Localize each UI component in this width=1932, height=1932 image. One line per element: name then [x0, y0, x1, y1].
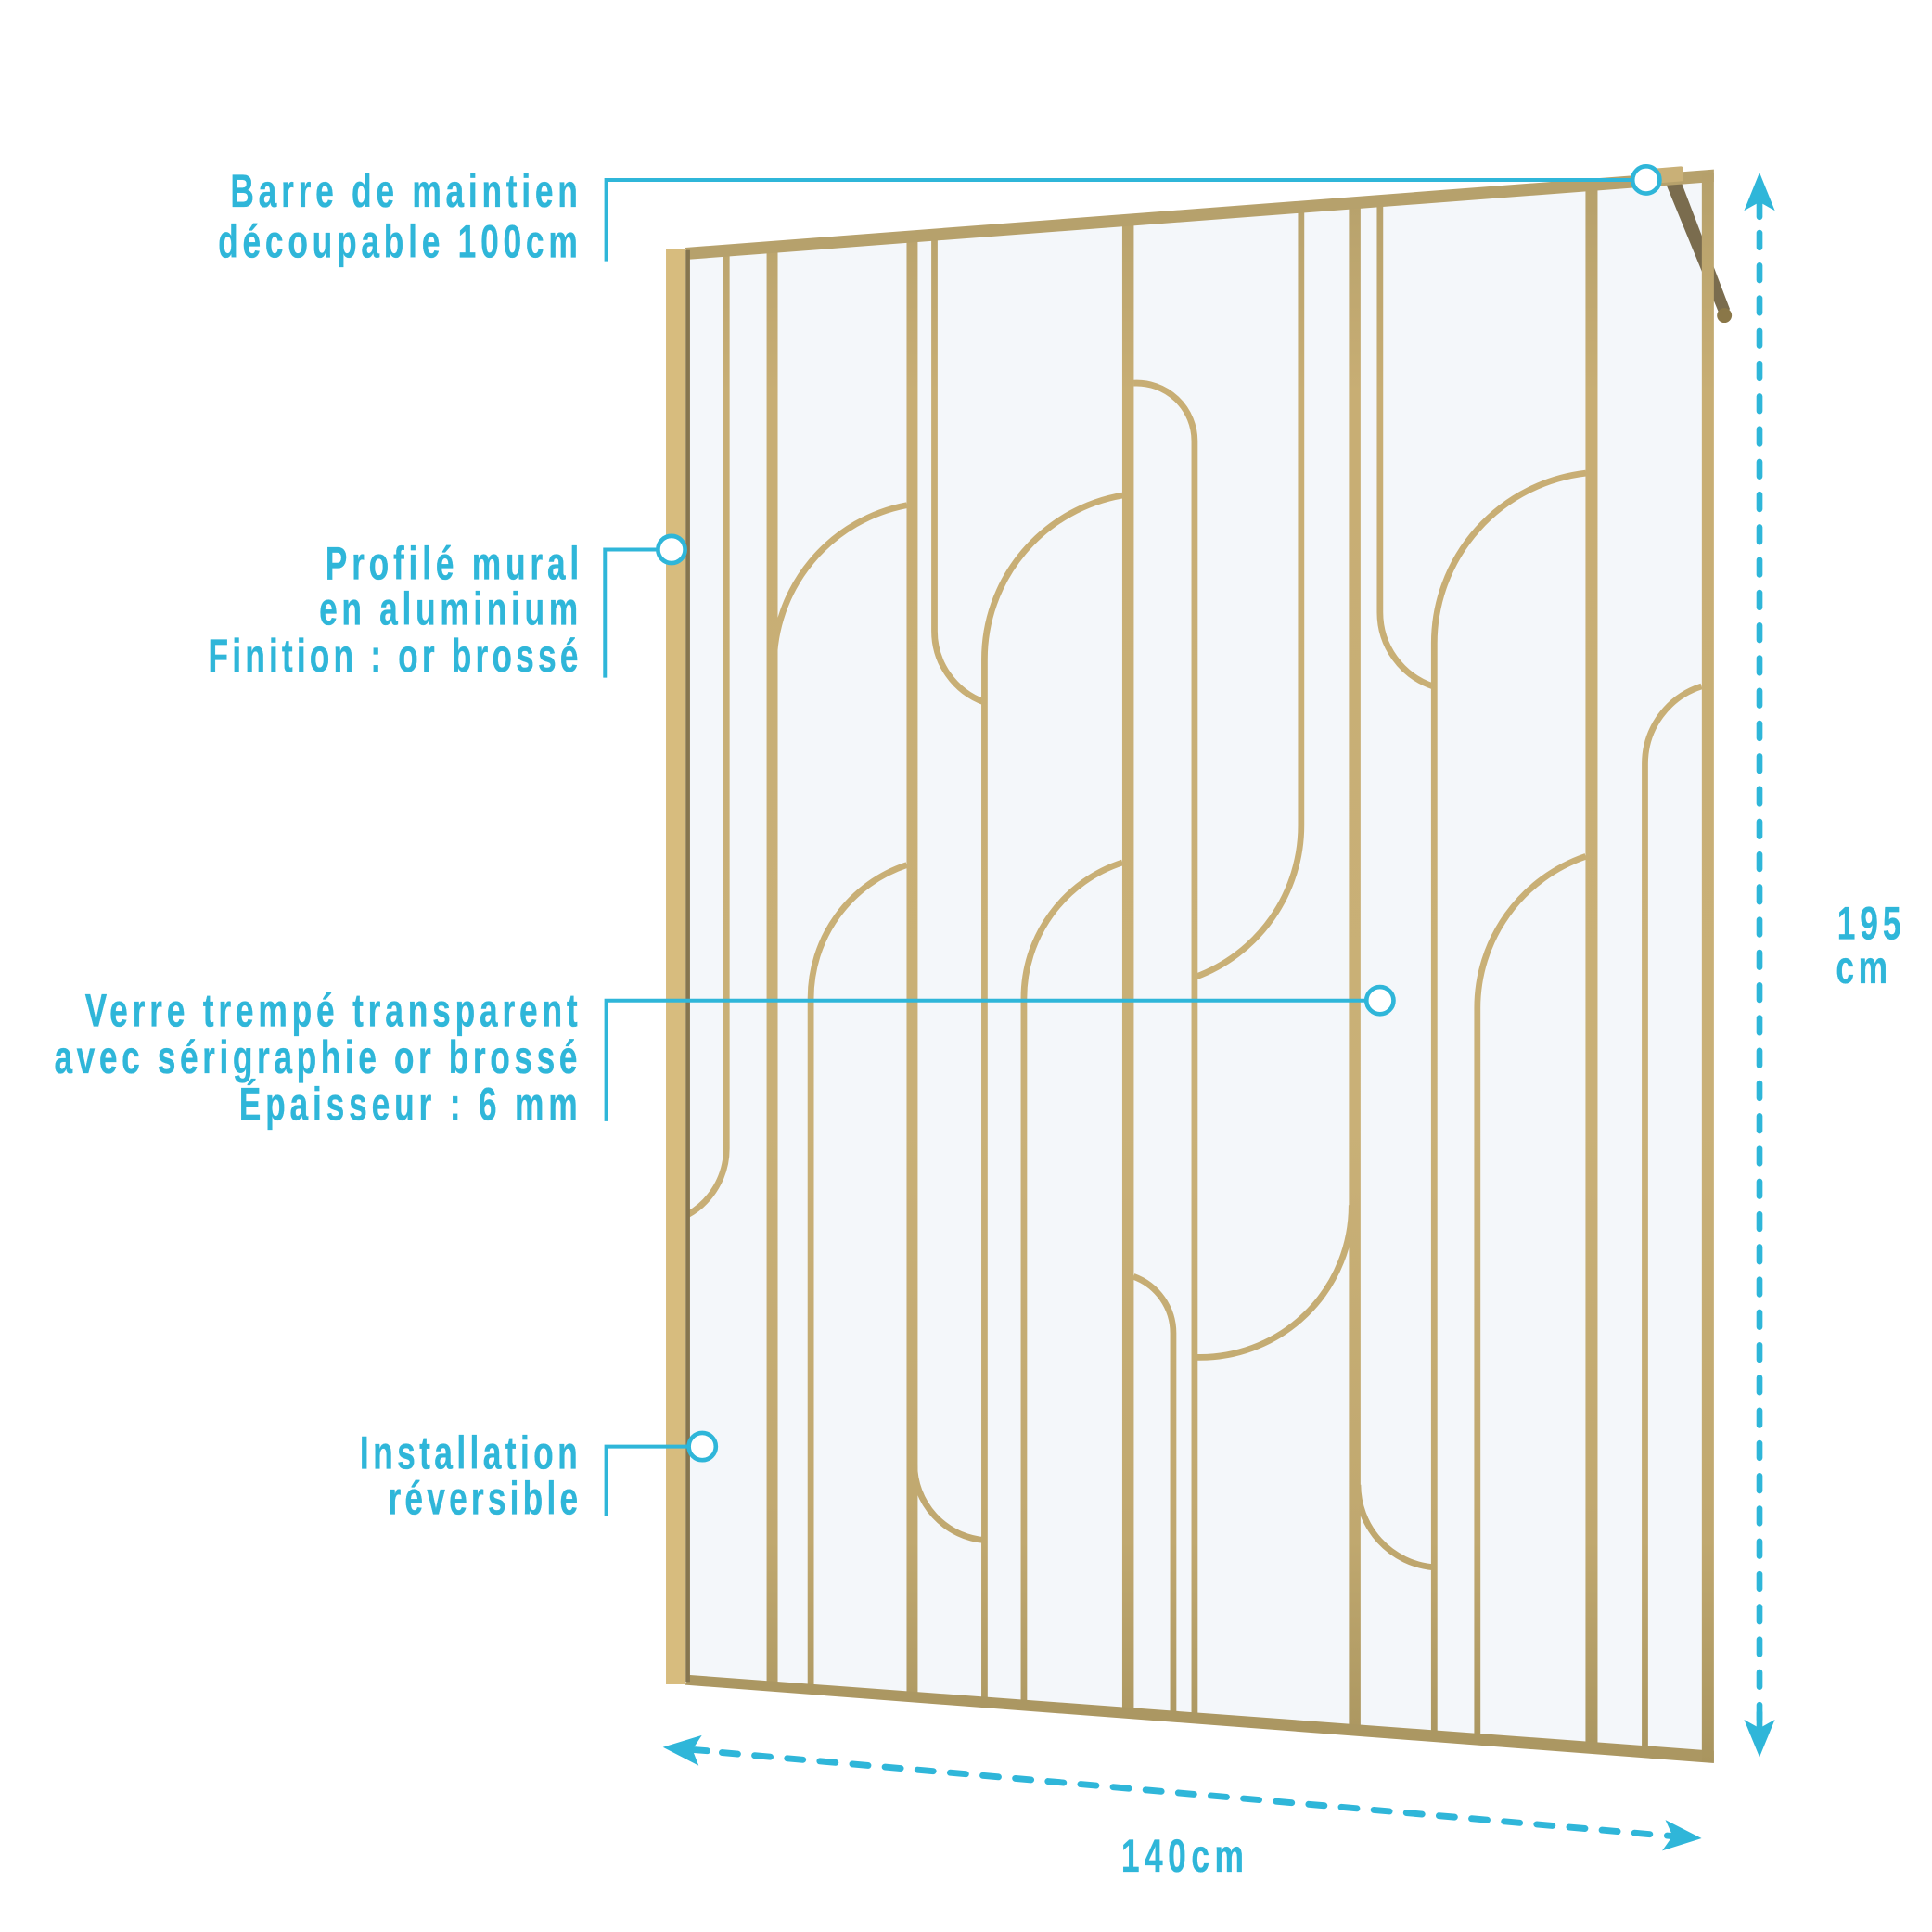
- height dimension arrow: [1744, 173, 1775, 1757]
- vertical gold bars: [767, 185, 1597, 1745]
- wall profile: [666, 249, 690, 1684]
- height label: [1836, 898, 1901, 994]
- outer frame: [685, 170, 1714, 1763]
- callout: barre de maintien: découpable 100cm: [218, 217, 578, 268]
- callout: verre trempé: [54, 986, 1393, 1131]
- callout: profilé mural: [209, 536, 685, 683]
- callout: profilé mural: Profilé mural: [326, 539, 579, 590]
- height label: 195: [1837, 898, 1901, 950]
- callout: profilé mural: Finition : or brossé: [209, 631, 578, 683]
- width dimension arrow: [663, 1735, 1702, 1850]
- callout: verre trempé: Épaisseur : 6 mm: [239, 1080, 578, 1131]
- glass panel: [687, 180, 1707, 1755]
- callout: installation réversible: Installation: [360, 1428, 578, 1479]
- stabiliser arm: [1666, 184, 1732, 323]
- height label: cm: [1836, 942, 1887, 994]
- callout: profilé mural: en aluminium: [319, 584, 578, 635]
- width label: 140cm: [1121, 1831, 1244, 1882]
- gold screen-printed pattern: [687, 206, 1702, 1749]
- callout: installation réversible: réversible: [388, 1474, 578, 1525]
- shower screen: [666, 166, 1732, 1763]
- callout: verre trempé: Verre trempé transparent: [85, 986, 578, 1037]
- top bracket: [1651, 166, 1683, 184]
- callout: barre de maintien: Barre de maintien: [230, 166, 578, 218]
- callout: barre de maintien: [218, 166, 1659, 268]
- callout: verre trempé: avec sérigraphie or brossé: [54, 1032, 577, 1084]
- callout: installation réversible: [360, 1428, 716, 1525]
